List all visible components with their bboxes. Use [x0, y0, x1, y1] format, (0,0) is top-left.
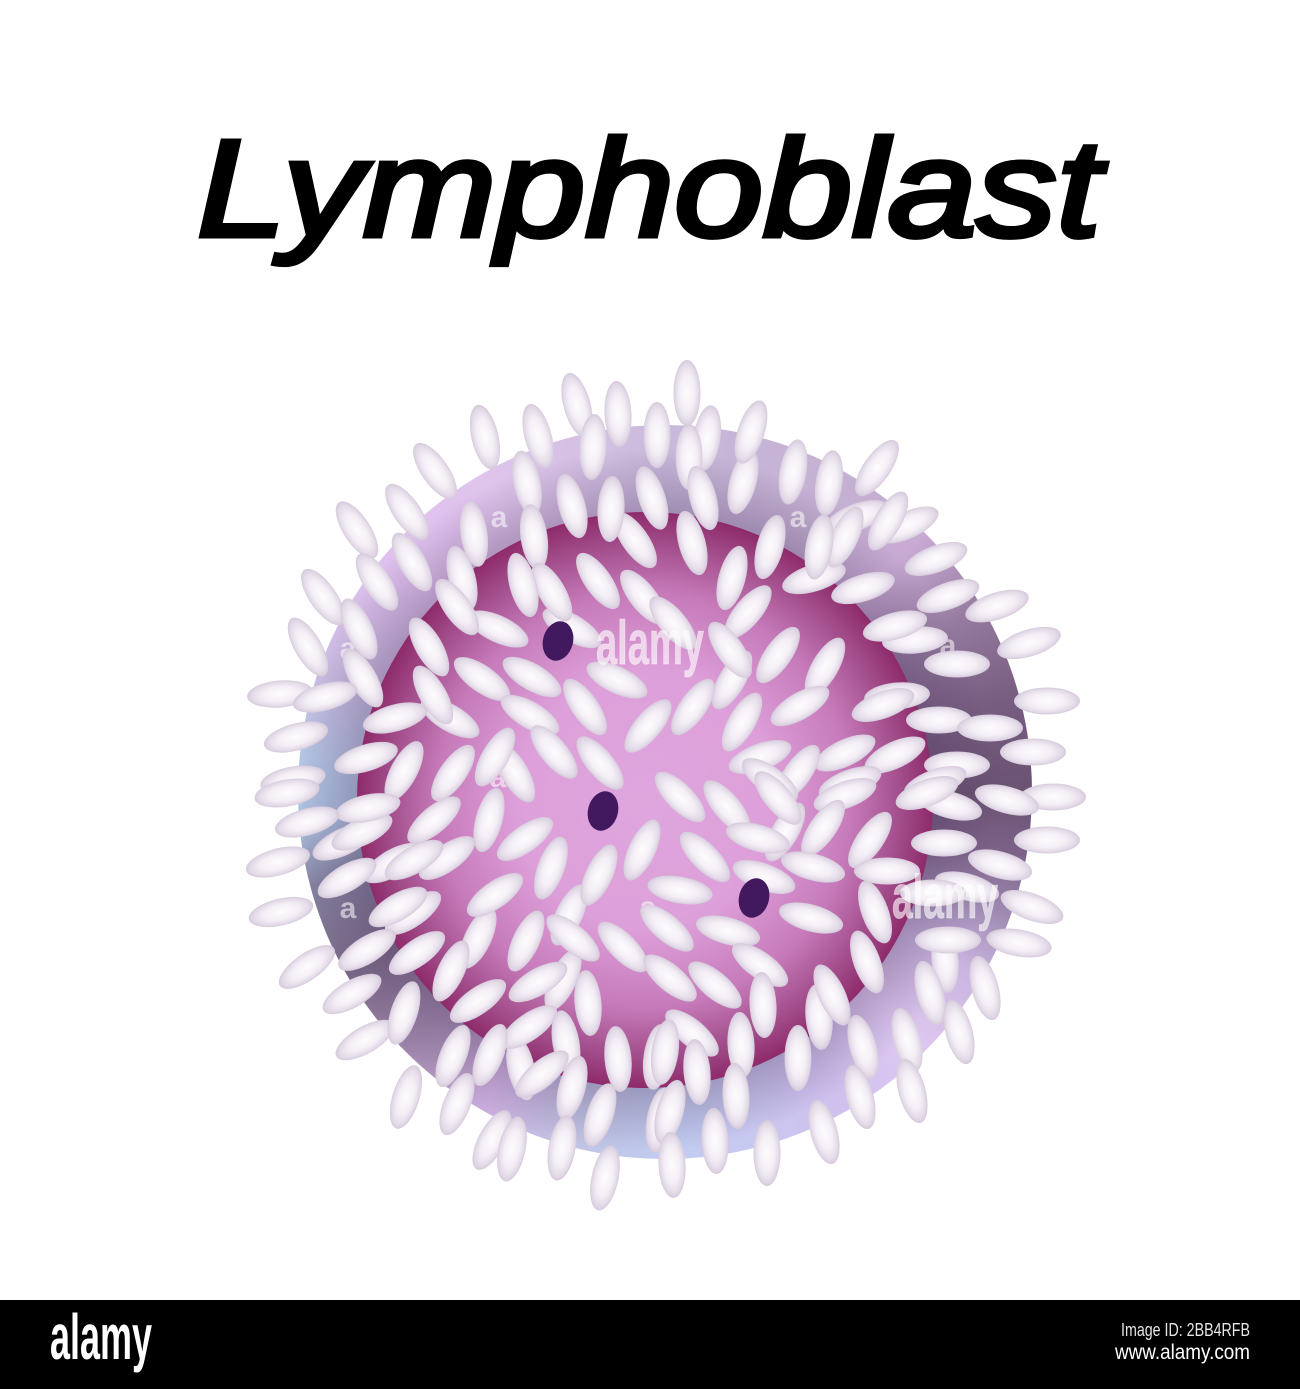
title: Lymphoblast [197, 112, 1108, 266]
granules top right [641, 360, 1080, 810]
granules top left [246, 370, 680, 808]
lymphoblast cell illustration [246, 360, 1086, 1210]
granules behind [307, 403, 961, 1103]
granules bottom right [633, 764, 1086, 1199]
watermark letters on the ring: a [491, 501, 508, 534]
watermark words: alamy [892, 863, 998, 932]
watermark letters on the ring: a [490, 761, 507, 794]
watermark letters on the ring: a [340, 632, 357, 665]
watermark letters on the ring: a [790, 501, 807, 534]
watermark letters on the ring: a [640, 891, 657, 924]
watermark letters on the ring: a [340, 892, 357, 925]
granules bottom left [243, 774, 679, 1213]
footer text: Image ID: 2BB4RFB [1121, 1320, 1250, 1340]
watermark letters on the ring [340, 501, 957, 1058]
watermark words [596, 609, 998, 932]
watermark letters on the ring: a [790, 1025, 807, 1058]
watermark words: alamy [596, 609, 704, 678]
cell body drawing [246, 360, 1086, 1210]
footer text [50, 1301, 1250, 1373]
cell membrane ring [298, 425, 1032, 1159]
watermark letters on the ring: a [940, 629, 957, 662]
cytoplasm sphere [357, 512, 933, 1088]
footer bar [0, 1300, 1300, 1389]
membrane shading [298, 425, 1032, 1159]
footer text: www.alamy.com [1114, 1341, 1250, 1364]
footer text: alamy [50, 1301, 152, 1373]
nucleoli [538, 618, 774, 921]
